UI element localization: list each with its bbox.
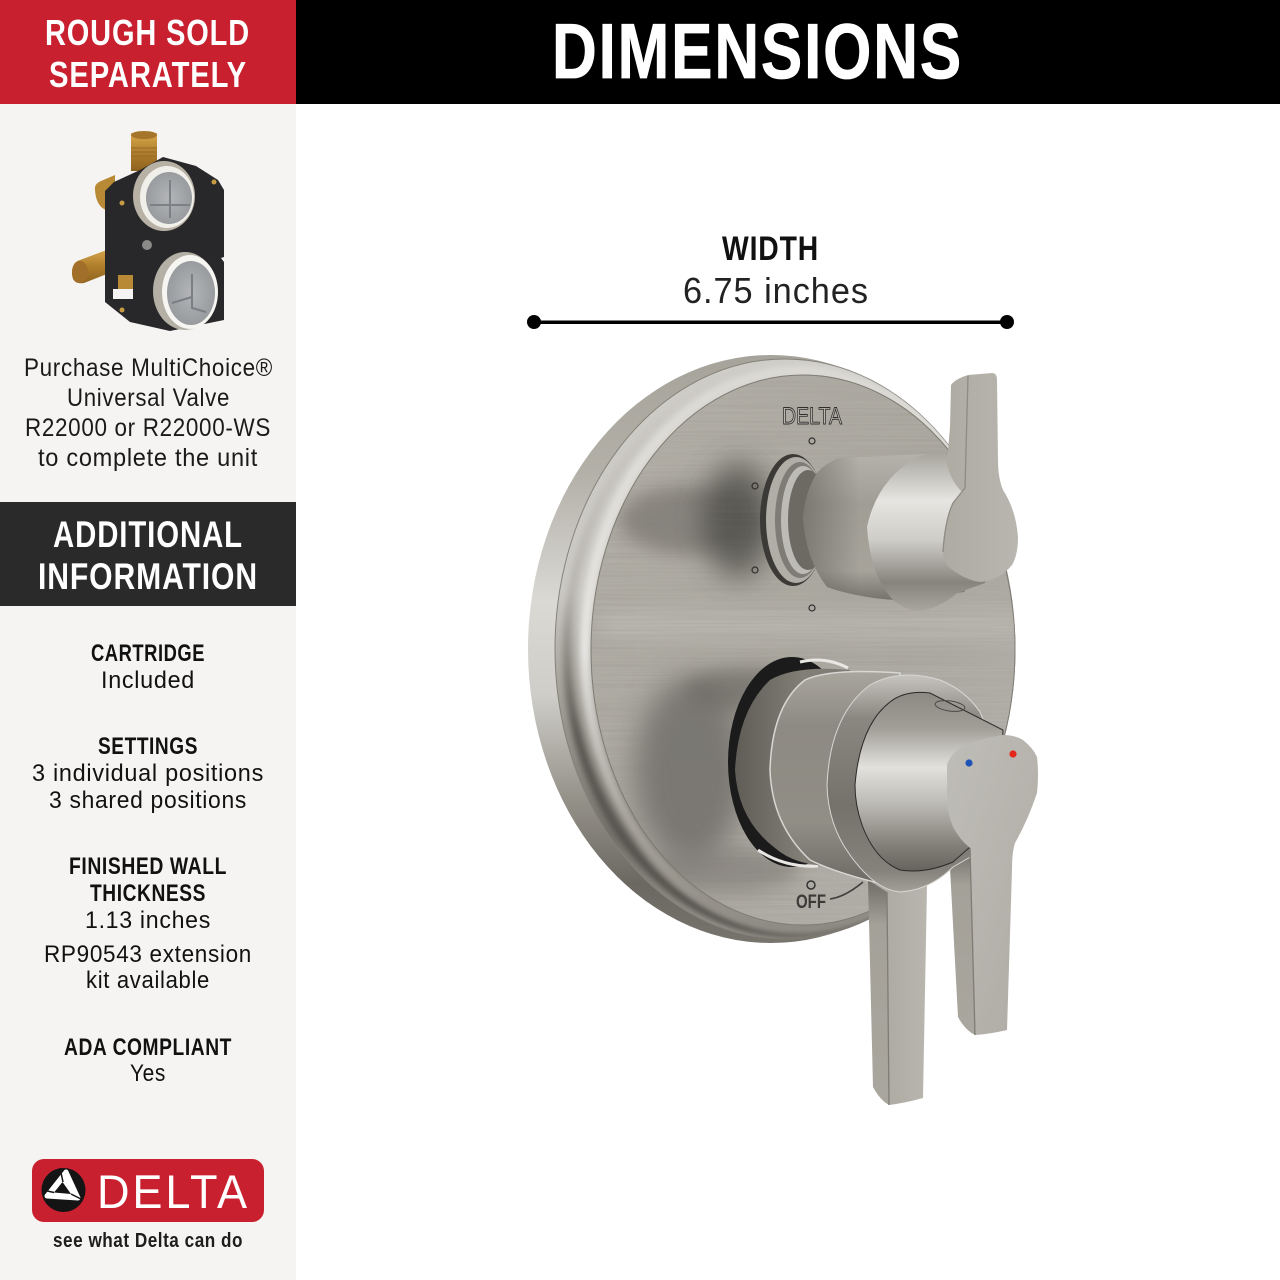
plate: off indicator: OFF [796,892,826,913]
plate: off indicator [796,881,863,913]
title banner: dimensions: DIMENSIONS [552,7,963,95]
logo: delta: DELTA [97,1165,250,1218]
panel: sidebar background [0,0,296,1280]
text block: purchase note: Purchase MultiChoice® [24,354,273,382]
indicator: cold dot [965,759,973,767]
lower knob: bright gap [758,660,848,866]
plate: inner disc [590,375,1020,925]
plate: stepped ring [555,359,1017,939]
banner: rough sold separately [0,0,296,104]
upper knob: body [803,453,965,600]
upper knob: collar [760,454,828,586]
spec: finished wall thickness: kit available [86,967,210,994]
heading: additional information: INFORMATION [38,556,258,597]
lower knob: lever right side [950,848,975,1035]
lower knob: cone [855,692,1003,871]
lower knob: sleeve [735,669,850,866]
banner: rough sold separately: ROUGH SOLD [45,12,250,53]
spec: settings: 3 shared positions [49,787,247,814]
text block: purchase note [24,354,273,472]
title banner: dimensions [296,0,1280,104]
lower knob: dark base [728,657,856,867]
spec: cartridge [91,640,205,694]
label: width dimension: WIDTH [722,230,819,268]
icon: rough-in valve photo [72,131,224,331]
plate: outer rim [528,355,1014,943]
spec: finished wall thickness [44,853,252,994]
heading: additional information: ADDITIONAL [53,514,243,555]
spec: cartridge: Included [101,667,195,694]
spec: finished wall thickness: 1.13 inches [85,907,211,934]
spec: finished wall thickness: RP90543 extension [44,941,252,968]
spec: settings: 3 individual positions [32,760,264,787]
spec: ada compliant: ADA COMPLIANT [64,1034,232,1061]
upper knob: lever edge highlight [943,376,968,552]
upper knob: lever [943,373,1018,582]
spec: finished wall thickness: FINISHED WALL [69,853,227,880]
lower knob: barrel [770,672,900,888]
heading: additional information [0,502,296,606]
upper knob: cone [867,453,1000,611]
product: shower valve trim [528,355,1038,1105]
banner: rough sold separately: SEPARATELY [49,54,247,95]
spec: finished wall thickness: THICKNESS [90,880,206,907]
spec: settings [32,733,264,814]
logo: delta [32,1159,264,1252]
text block: purchase note: Universal Valve [67,384,230,412]
label: width dimension [683,230,869,311]
spec: settings: SETTINGS [98,733,198,760]
lower knob: ring [827,675,1000,892]
logo: delta: see what Delta can do [53,1230,243,1252]
spec: cartridge: CARTRIDGE [91,640,205,667]
plate: position markers [752,438,815,611]
lower knob: handle head and lever [947,735,1038,1035]
spec: ada compliant: Yes [130,1060,166,1087]
arrow: width dimension line [527,315,1014,329]
label: width dimension: 6.75 inches [683,270,869,311]
lower knob: lever left [868,880,927,1105]
indicator: hot dot [1009,750,1017,758]
spec: ada compliant [64,1034,232,1087]
text block: purchase note: to complete the unit [38,444,258,472]
text block: purchase note: R22000 or R22000-WS [25,414,271,442]
lower knob: top button outline [934,699,966,713]
plate: engraved delta mark: DELTA [782,403,842,430]
lower knob: lever edge line [970,848,975,1035]
